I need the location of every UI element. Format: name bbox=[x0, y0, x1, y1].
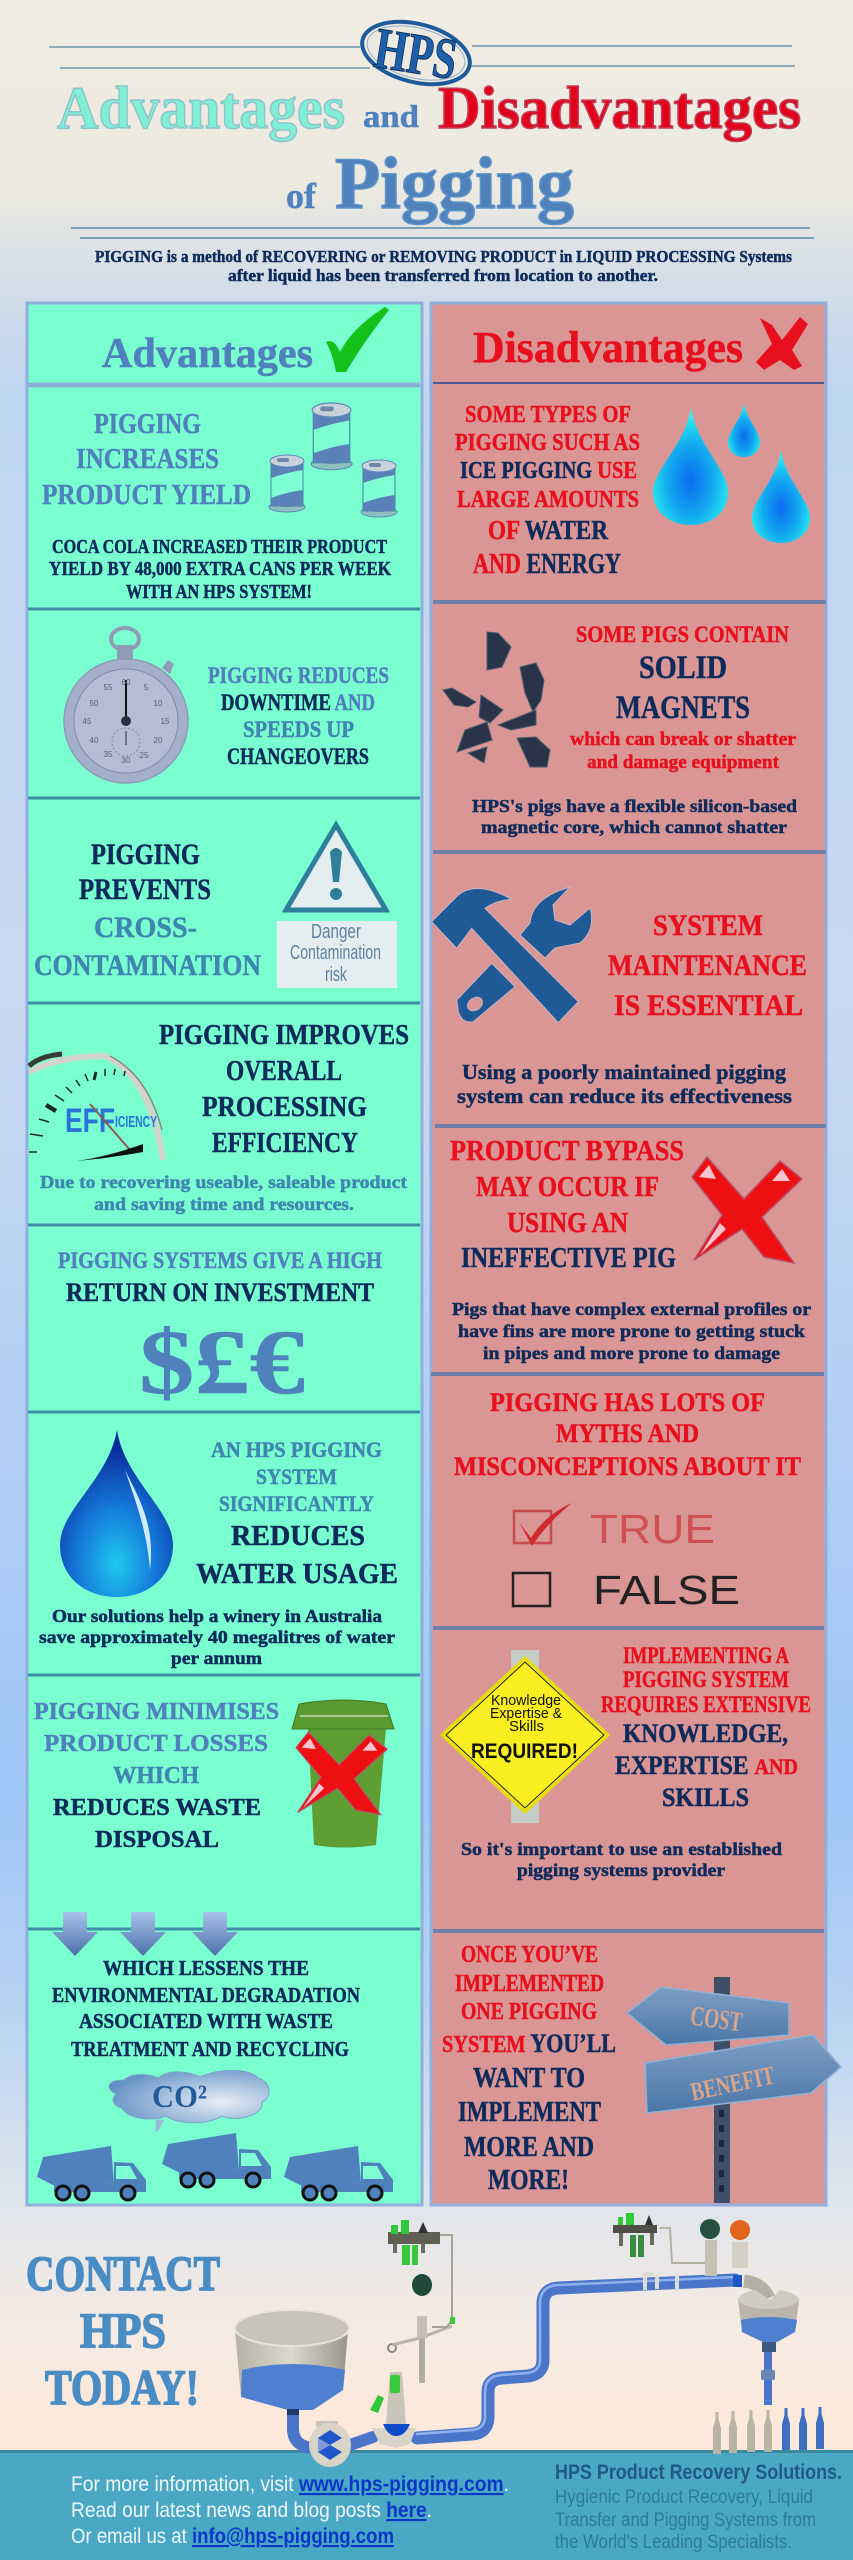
icon: water drop bbox=[60, 1430, 173, 1597]
contact heading: CONTACT bbox=[26, 2245, 220, 2301]
icon: stopwatch: 30 bbox=[122, 756, 131, 765]
block: downtime: PIGGING REDUCES bbox=[208, 663, 389, 688]
icon: yellow required sign: Expertise & bbox=[490, 1705, 562, 1722]
block: return on investment bbox=[58, 1248, 382, 1413]
company description: Transfer and Pigging Systems from bbox=[555, 2510, 816, 2531]
block: environmental degradation: WHICH LESSENS THE bbox=[103, 1956, 309, 1980]
block: efficiency: OVERALL bbox=[226, 1055, 342, 1087]
false option bbox=[513, 1567, 740, 1613]
block: downtime: SPEEDS UP bbox=[243, 717, 354, 742]
block: implement more bbox=[442, 1942, 841, 2203]
block: efficiency: and saving time and resources. bbox=[94, 1194, 354, 1214]
icon: red cross bbox=[756, 317, 808, 370]
block: return on investment: PIGGING SYSTEMS GIVE A HIGH bbox=[58, 1248, 382, 1273]
block: knowledge: PIGGING SYSTEM bbox=[623, 1667, 789, 1692]
true option bbox=[514, 1503, 715, 1552]
icon: stopwatch: 20 bbox=[154, 736, 163, 745]
block: system maintenance: SYSTEM bbox=[653, 909, 763, 942]
block: product yield: WITH AN HPS SYSTEM! bbox=[126, 582, 312, 603]
first gauge bbox=[412, 2274, 432, 2296]
block: water and energy: LARGE AMOUNTS bbox=[457, 487, 639, 513]
block: water usage: AN HPS PIGGING bbox=[211, 1437, 382, 1462]
block: water usage: Our solutions help a winery in Australia bbox=[52, 1606, 382, 1626]
block: downtime: CHANGEOVERS bbox=[227, 744, 369, 769]
icon: CO2 cloud: CO² bbox=[152, 2078, 207, 2114]
block: product yield: PRODUCT YIELD bbox=[42, 479, 251, 511]
block: implement more: WANT TO bbox=[473, 2063, 585, 2094]
block: cross contamination bbox=[34, 825, 397, 988]
block: implement more: ONCE YOU’VE bbox=[461, 1942, 598, 1968]
header rules bbox=[49, 46, 795, 68]
intro text: after liquid has been transferred from location to another. bbox=[228, 266, 658, 285]
block: solid magnets bbox=[443, 622, 797, 837]
first air unit bbox=[388, 2220, 455, 2327]
icon: stopwatch: 55 bbox=[104, 683, 113, 692]
block: solid magnets: magnetic core, which cannot shatter bbox=[481, 817, 787, 837]
block: myths: PIGGING HAS LOTS OF bbox=[490, 1388, 765, 1417]
icon: hammer and wrench bbox=[432, 887, 592, 1023]
contact heading: TODAY! bbox=[45, 2359, 199, 2415]
title: Pigging bbox=[335, 143, 574, 225]
block: myths bbox=[454, 1388, 801, 1613]
block: product yield: PIGGING bbox=[94, 408, 201, 440]
icon: large red cross bbox=[692, 1157, 802, 1263]
icon: yellow required sign: REQUIRED! bbox=[471, 1740, 578, 1763]
block: system maintenance: MAINTENANCE bbox=[608, 949, 807, 982]
block: knowledge: SKILLS bbox=[662, 1783, 749, 1812]
block: cross contamination: PIGGING bbox=[91, 838, 200, 871]
block: cross contamination: CONTAMINATION bbox=[34, 949, 261, 982]
outlet funnel bbox=[733, 2275, 799, 2405]
second and third gauges bbox=[700, 2219, 750, 2276]
icon: green tick bbox=[326, 307, 389, 372]
company description bbox=[555, 2461, 842, 2553]
block: knowledge: EXPERTISE AND bbox=[615, 1751, 798, 1780]
heading: disadvantages: Disadvantages bbox=[473, 323, 743, 372]
block: solid magnets: SOME PIGS CONTAIN bbox=[576, 622, 789, 647]
block: downtime: DOWNTIME AND bbox=[221, 690, 375, 715]
panel: disadvantages bbox=[431, 303, 841, 2205]
block: cross contamination: CROSS- bbox=[94, 911, 197, 944]
icon: warning triangle bbox=[286, 825, 386, 910]
diagram: pigging system bbox=[235, 2213, 824, 2467]
block: waste disposal bbox=[34, 1699, 394, 1853]
block: product bypass: Pigs that have complex external profiles or bbox=[452, 1299, 811, 1319]
block: product yield bbox=[42, 403, 397, 603]
block: water and energy: SOME TYPES OF bbox=[465, 402, 631, 428]
block: water and energy: AND ENERGY bbox=[473, 549, 621, 580]
icon: down arrows bbox=[52, 1912, 238, 1956]
icon: cans bbox=[269, 403, 397, 517]
contact links: Read our latest news and blog posts here. bbox=[71, 2499, 432, 2522]
block: water usage bbox=[39, 1430, 398, 1668]
block: system maintenance bbox=[432, 887, 807, 1108]
title: and bbox=[363, 98, 419, 134]
block: water usage: REDUCES bbox=[231, 1521, 365, 1552]
pipe clamps bbox=[642, 2272, 679, 2291]
block: efficiency bbox=[29, 1019, 409, 1214]
block: solid magnets: and damage equipment bbox=[587, 752, 780, 773]
icon: efficiency gauge: EFF bbox=[65, 1102, 115, 1140]
icon: stopwatch bbox=[64, 628, 188, 783]
block: water and energy bbox=[455, 402, 810, 580]
block: solid magnets: which can break or shatter bbox=[570, 729, 797, 750]
icon: stopwatch: 45 bbox=[83, 717, 92, 726]
block: implement more: MORE AND bbox=[464, 2132, 594, 2163]
bottles bbox=[713, 2407, 824, 2454]
block: water usage: SIGNIFICANTLY bbox=[219, 1491, 374, 1516]
logo: HPS: HPS bbox=[370, 15, 462, 92]
block: product bypass: in pipes and more prone to damage bbox=[483, 1343, 780, 1363]
second air unit bbox=[613, 2213, 705, 2263]
block: implement more: ONE PIGGING bbox=[461, 1999, 597, 2025]
block: water usage: save approximately 40 megalitres of water bbox=[39, 1627, 395, 1647]
block: knowledge: IMPLEMENTING A bbox=[623, 1643, 789, 1668]
icon: stopwatch: 15 bbox=[161, 717, 170, 726]
icon: efficiency gauge bbox=[29, 1054, 163, 1161]
block: system maintenance: system can reduce its effectiveness bbox=[457, 1084, 792, 1108]
block: waste disposal: REDUCES WASTE bbox=[53, 1795, 261, 1821]
block: water usage: WATER USAGE bbox=[196, 1559, 398, 1590]
block: implement more: IMPLEMENTED bbox=[455, 1971, 604, 1997]
block: implement more: SYSTEM YOU’LL bbox=[442, 2029, 616, 2058]
false option: FALSE bbox=[593, 1567, 740, 1613]
block: implement more: IMPLEMENT bbox=[458, 2097, 601, 2128]
contact heading bbox=[26, 2245, 220, 2415]
block: environmental degradation: ENVIRONMENTAL DEGRADATION bbox=[52, 1983, 360, 2007]
icon: cost benefit signpost bbox=[627, 1977, 841, 2203]
title rules bbox=[71, 228, 814, 238]
icon: yellow required sign: Knowledge bbox=[491, 1692, 561, 1709]
title bbox=[57, 75, 801, 225]
block: solid magnets: SOLID bbox=[639, 650, 727, 686]
contact links: For more information, visit www.hps-pigging.com. bbox=[71, 2473, 509, 2496]
icon: trucks bbox=[37, 2133, 393, 2200]
block: myths: MISCONCEPTIONS ABOUT IT bbox=[454, 1452, 801, 1481]
icon: magnet shards bbox=[443, 632, 550, 767]
feed tank bbox=[235, 2310, 349, 2415]
block: product bypass: INEFFECTIVE PIG bbox=[461, 1243, 676, 1274]
icon: stopwatch: 25 bbox=[140, 751, 149, 760]
contact links: Or email us at info@hps-pigging.com bbox=[71, 2525, 394, 2548]
block: environmental degradation bbox=[37, 1912, 393, 2200]
block: system maintenance: IS ESSENTIAL bbox=[614, 989, 803, 1022]
block: product bypass: have fins are more prone to getting stuck bbox=[458, 1321, 805, 1341]
block: efficiency: PROCESSING bbox=[202, 1091, 367, 1123]
icon: cost benefit signpost: COST bbox=[688, 2001, 744, 2039]
heading: advantages bbox=[102, 307, 389, 377]
block: waste disposal: DISPOSAL bbox=[95, 1827, 219, 1853]
block: return on investment: RETURN ON INVESTMENT bbox=[66, 1278, 374, 1307]
main pipework bbox=[293, 2277, 735, 2448]
icon: efficiency gauge: ICIENCY bbox=[115, 1114, 157, 1131]
block: solid magnets: HPS's pigs have a flexible silicon-based bbox=[472, 796, 797, 816]
company description: the World's Leading Specialists. bbox=[555, 2532, 792, 2553]
block: product bypass bbox=[450, 1136, 811, 1363]
icon: stopwatch: 35 bbox=[104, 750, 113, 759]
block: knowledge: pigging systems provider bbox=[517, 1860, 725, 1880]
icon: stopwatch: 5 bbox=[144, 683, 149, 692]
block: knowledge: KNOWLEDGE, bbox=[623, 1719, 788, 1748]
block: waste disposal: WHICH bbox=[113, 1763, 199, 1789]
contact heading: HPS bbox=[80, 2302, 166, 2358]
block: efficiency: PIGGING IMPROVES bbox=[159, 1019, 409, 1051]
block: waste disposal: PRODUCT LOSSES bbox=[44, 1731, 268, 1757]
valve and launcher bbox=[370, 2316, 452, 2448]
block: product bypass: MAY OCCUR IF bbox=[476, 1172, 659, 1203]
block: system maintenance: Using a poorly maintained pigging bbox=[462, 1060, 787, 1084]
block: cross contamination: PREVENTS bbox=[79, 873, 211, 906]
contact links bbox=[71, 2473, 509, 2548]
danger label: risk bbox=[325, 964, 348, 986]
pump bbox=[309, 2421, 351, 2467]
intro text bbox=[95, 247, 792, 285]
block: efficiency: Due to recovering useable, saleable product bbox=[40, 1172, 407, 1192]
block: downtime bbox=[64, 628, 389, 783]
icon: water drops bbox=[653, 403, 810, 543]
icon: stopwatch: 40 bbox=[90, 736, 99, 745]
block: waste disposal: PIGGING MINIMISES bbox=[34, 1699, 279, 1725]
block: product yield: INCREASES bbox=[76, 443, 219, 475]
block: product bypass: USING AN bbox=[507, 1208, 628, 1239]
icon: cost benefit signpost: BENEFIT bbox=[688, 2061, 777, 2107]
intro text: PIGGING is a method of RECOVERING or REMOVING PRODUCT in LIQUID PROCESSING Systems bbox=[95, 247, 792, 266]
block: water usage: per annum bbox=[171, 1648, 262, 1668]
icon: stopwatch: 10 bbox=[154, 699, 163, 708]
block: product yield: YIELD BY 48,000 EXTRA CANS PER WEEK bbox=[49, 559, 392, 580]
currency symbols: $£€ bbox=[139, 1311, 305, 1413]
block: water and energy: PIGGING SUCH AS bbox=[455, 430, 640, 456]
block: knowledge: So it's important to use an established bbox=[461, 1839, 782, 1859]
danger label bbox=[277, 921, 397, 988]
company description: Hygienic Product Recovery, Liquid bbox=[555, 2487, 813, 2508]
block: solid magnets: MAGNETS bbox=[616, 690, 750, 726]
block: water and energy: OF WATER bbox=[488, 515, 608, 545]
icon: green bin with red cross bbox=[292, 1700, 394, 1848]
icon: yellow required sign bbox=[442, 1650, 608, 1823]
block: product yield: COCA COLA INCREASED THEIR PRODUCT bbox=[52, 537, 387, 558]
heading: advantages: Advantages bbox=[102, 331, 313, 377]
block: efficiency: EFFICIENCY bbox=[212, 1127, 358, 1159]
block: implement more: MORE! bbox=[488, 2165, 569, 2196]
icon: stopwatch: 60 bbox=[122, 678, 131, 687]
block: knowledge: REQUIRES EXTENSIVE bbox=[601, 1692, 811, 1717]
true option: TRUE bbox=[590, 1506, 715, 1552]
icon: stopwatch: 50 bbox=[90, 699, 99, 708]
block: myths: MYTHS AND bbox=[556, 1419, 699, 1448]
block: environmental degradation: TREATMENT AND RECYCLING bbox=[71, 2037, 349, 2061]
block: environmental degradation: ASSOCIATED WITH WASTE bbox=[79, 2009, 333, 2033]
title: Disadvantages bbox=[438, 75, 801, 141]
block: water and energy: ICE PIGGING USE bbox=[460, 458, 637, 484]
danger label: Danger bbox=[311, 921, 361, 943]
title: Advantages bbox=[57, 75, 345, 141]
block: knowledge bbox=[442, 1643, 811, 1880]
icon: yellow required sign: Skills bbox=[509, 1718, 544, 1735]
footer band bbox=[0, 2450, 853, 2560]
icon: CO2 cloud bbox=[109, 2070, 269, 2132]
block: water usage: SYSTEM bbox=[256, 1464, 337, 1489]
panel: advantages bbox=[27, 303, 422, 2205]
title: of bbox=[286, 176, 317, 216]
block: product bypass: PRODUCT BYPASS bbox=[450, 1136, 684, 1167]
danger label: Contamination bbox=[290, 942, 381, 964]
